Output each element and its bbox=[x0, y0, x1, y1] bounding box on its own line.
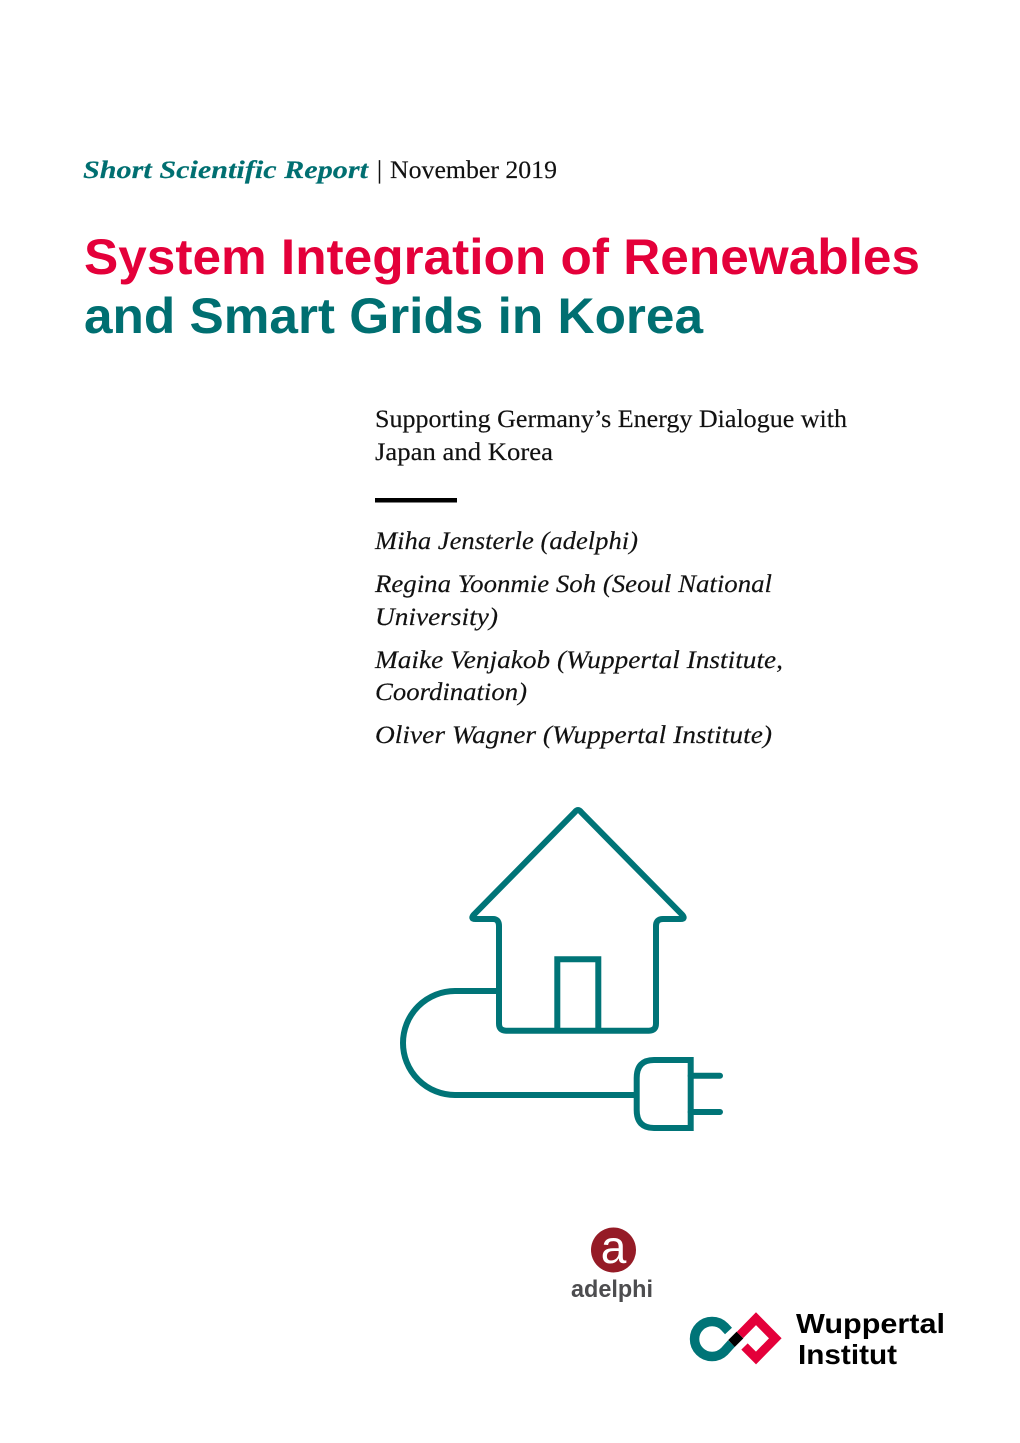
authors list: Regina Yoonmie Soh (Seoul National bbox=[374, 569, 772, 598]
authors list bbox=[374, 526, 783, 749]
report type and date line: | bbox=[377, 155, 382, 184]
wordmark: Wuppertal bbox=[796, 1308, 945, 1339]
plug body bbox=[637, 1060, 691, 1128]
logo: adelphi: adelphi bbox=[571, 1276, 653, 1303]
logo: adelphi bbox=[571, 1221, 653, 1303]
divider bar bbox=[375, 498, 457, 502]
door bbox=[557, 959, 598, 1031]
report type and date line: Short Scientific Report bbox=[83, 155, 369, 184]
cable bbox=[403, 991, 637, 1095]
title: and Smart Grids in Korea bbox=[84, 288, 704, 344]
authors list: University) bbox=[375, 602, 498, 631]
logo: Wuppertal Institut: Institut bbox=[798, 1339, 897, 1370]
title bbox=[84, 229, 920, 344]
report type and date line bbox=[83, 155, 557, 184]
logo: adelphi: a bbox=[601, 1221, 627, 1273]
authors list: Maike Venjakob (Wuppertal Institute, bbox=[374, 645, 783, 674]
subtitle: Supporting Germany’s Energy Dialogue with bbox=[375, 404, 847, 433]
authors list: Oliver Wagner (Wuppertal Institute) bbox=[375, 720, 772, 749]
title: System Integration of Renewables bbox=[84, 229, 920, 285]
subtitle: Japan and Korea bbox=[375, 437, 553, 466]
subtitle bbox=[375, 404, 847, 466]
logo mark bbox=[695, 1319, 775, 1358]
icon: house with plug bbox=[403, 810, 720, 1128]
report type and date line: November 2019 bbox=[390, 155, 557, 184]
house outline bbox=[472, 810, 684, 1031]
authors list: Miha Jensterle (adelphi) bbox=[374, 526, 638, 555]
logo: Wuppertal Institut bbox=[695, 1308, 945, 1370]
plug prongs bbox=[691, 1076, 720, 1112]
authors list: Coordination) bbox=[375, 677, 527, 706]
